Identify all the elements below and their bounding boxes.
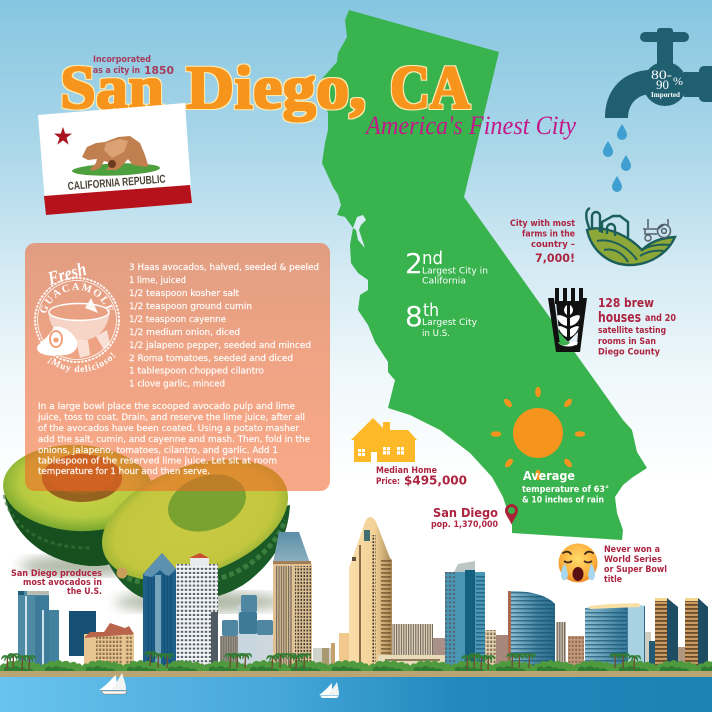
text: farms: City with most (510, 219, 575, 229)
text: never won: title (604, 575, 622, 585)
building: blue pentagon tower (143, 553, 176, 667)
text: avocados: San Diego produces (11, 569, 102, 579)
building: right twin towers (655, 598, 708, 667)
icon: guacamole stamp logo: GUACAMOLE (40, 283, 114, 313)
text: farms: 7,000! (535, 251, 575, 265)
text: brew houses (598, 295, 676, 358)
text: ingredients list (129, 263, 319, 390)
text: 8th largest city in US: Largest City (422, 318, 477, 328)
icon: guacamole stamp logo (34, 259, 120, 372)
text: avocados (11, 569, 102, 597)
text: 2nd largest city in California: 2 (405, 247, 423, 280)
shoreline greenery (0, 651, 712, 672)
text: median home price: $495,000 (404, 474, 467, 488)
text: 2nd largest city in California: California (422, 276, 466, 286)
building: tall tan tower (349, 517, 392, 667)
text: recipe directions: In a large bowl place the scooped avocado pulp and lime (38, 402, 295, 412)
text: farms (510, 219, 575, 265)
text: recipe directions: tablespoon of the reserved lime juice. Let sit at room (38, 456, 277, 466)
building: tan tower with blue roof (273, 532, 312, 666)
illustration: city skyline (0, 517, 712, 672)
text: brew houses: Diego County (598, 348, 660, 358)
building: left blue towers (18, 591, 96, 667)
text: recipe directions: temperature for 1 hour and then serve. (38, 467, 210, 477)
text: avocados: the U.S. (67, 587, 102, 597)
text: 8th largest city in US: th (423, 300, 439, 321)
title: San (60, 55, 164, 122)
text: ingredients list: 1/2 teaspoon ground cumin (129, 302, 252, 312)
icon: sailboat (319, 682, 339, 698)
text: median home price: Price: (376, 477, 400, 487)
text: incorporated 1850 (93, 54, 174, 77)
text: farms: country – (531, 240, 575, 250)
text: never won: or Super Bowl (604, 565, 667, 575)
building: hotel (84, 623, 134, 667)
text: ingredients list: 1 tablespoon chopped cilantro (129, 366, 264, 376)
text: never won: World Series (604, 555, 662, 565)
text: brew houses: houses (598, 310, 641, 326)
text: San Diego population: pop. 1,370,000 (431, 520, 498, 530)
building: marriott towers (585, 603, 655, 667)
text: average temperature: temperature of 63° (522, 485, 609, 495)
text: ingredients list: 1/2 medium onion, diced (129, 328, 240, 338)
text: recipe directions (37, 402, 310, 477)
icon: farm (586, 208, 675, 265)
icon: house (351, 418, 417, 462)
icon: water faucet with percent imported: Imported (651, 90, 681, 99)
icon: California flag (38, 103, 192, 215)
text: ingredients list: 1/2 teaspoon cayenne (129, 315, 226, 325)
text: ingredients list: 1/2 teaspoon kosher salt (129, 289, 240, 299)
icon: water faucet with percent imported: 80- (651, 67, 672, 82)
icon: California flag: CALIFORNIA REPUBLIC (67, 174, 166, 193)
icon: guacamole stamp logo: ¡Muy delicioso! (47, 352, 116, 372)
text: 2nd largest city in California: Largest City in (422, 266, 488, 276)
panel: guacamole recipe (25, 243, 330, 491)
shoreline strip (0, 671, 712, 677)
icon: water faucet with percent imported: % (673, 74, 683, 88)
title: Diego, (186, 55, 366, 122)
text: average temperature: Average (523, 468, 575, 483)
text: avocados: most avocados in (23, 578, 102, 588)
icon: guacamole stamp logo: Fresh (45, 259, 89, 290)
text: median home price: Median Home (376, 466, 437, 476)
text: 2nd largest city in California: nd (422, 248, 443, 269)
text: San Diego population (431, 506, 498, 530)
building: white tower (176, 553, 218, 667)
illustration: avocado halves (1, 436, 305, 612)
text: recipe directions: onions, jalapeno, tomatoes, cilantro, and garlic. Add 1 (38, 446, 278, 456)
text: median home price (376, 466, 467, 488)
icon: water faucet with percent imported: 90 (656, 77, 669, 92)
text: incorporated 1850: as a city in (93, 65, 140, 75)
text: farms: farms in the (522, 230, 575, 240)
building: curved blue tower (508, 591, 555, 667)
building: blue glass tower (445, 561, 485, 667)
text: San Diego population: San Diego (433, 506, 498, 520)
text: brew houses: rooms in San (598, 337, 656, 347)
text: 8th largest city in US: in U.S. (422, 329, 450, 339)
building: striped mid block (378, 624, 447, 668)
text: average temperature: & 10 inches of rain (522, 496, 604, 506)
text: ingredients list: 3 Haas avocados, halved, seeded & peeled (129, 263, 319, 273)
icon: water faucet with percent imported (605, 28, 712, 118)
title: CA (390, 55, 470, 122)
text: never won: Never won a (604, 545, 660, 555)
text: incorporated 1850: Incorporated (93, 54, 151, 64)
text: ingredients list: 1 clove garlic, minced (129, 380, 225, 390)
icon: map pin (505, 504, 518, 524)
icon: sun (491, 387, 585, 480)
text: incorporated 1850: 1850 (144, 65, 174, 77)
title (60, 55, 470, 122)
water (0, 677, 712, 712)
text: brew houses: 128 brew (598, 295, 654, 310)
map: California state shape (318, 10, 647, 540)
text: average temperature (522, 468, 609, 506)
text: 2nd largest city in California (405, 247, 488, 286)
text: recipe directions: juice, toss to coat. Drain, and reserve the lime juice, after all (37, 413, 305, 423)
text: 8th largest city in US: 8 (405, 300, 423, 333)
icon: beer glass with wheat (548, 288, 587, 352)
icon: crying face (558, 544, 598, 582)
subtitle: America's Finest City: America's Finest City (364, 111, 576, 140)
text: recipe directions: of the avocados have been coated. Using a potato masher (38, 424, 299, 434)
text: 8th largest city in US (405, 300, 477, 339)
text: recipe directions: add the salt, cumin, and cayenne and mash. Then, fold in the (38, 435, 310, 445)
icon: sailboat (99, 673, 127, 694)
text: ingredients list: 1 lime, juiced (129, 276, 186, 286)
text: brew houses: and 20 (645, 313, 676, 324)
building: round towers (220, 595, 273, 667)
icon: water drops (603, 124, 631, 192)
text: never won (604, 545, 667, 585)
text: brew houses: satellite tasting (598, 326, 666, 336)
text: ingredients list: 1/2 jalapeno pepper, seeded and minced (129, 341, 311, 351)
text: ingredients list: 2 Roma tomatoes, seeded and diced (129, 354, 293, 364)
